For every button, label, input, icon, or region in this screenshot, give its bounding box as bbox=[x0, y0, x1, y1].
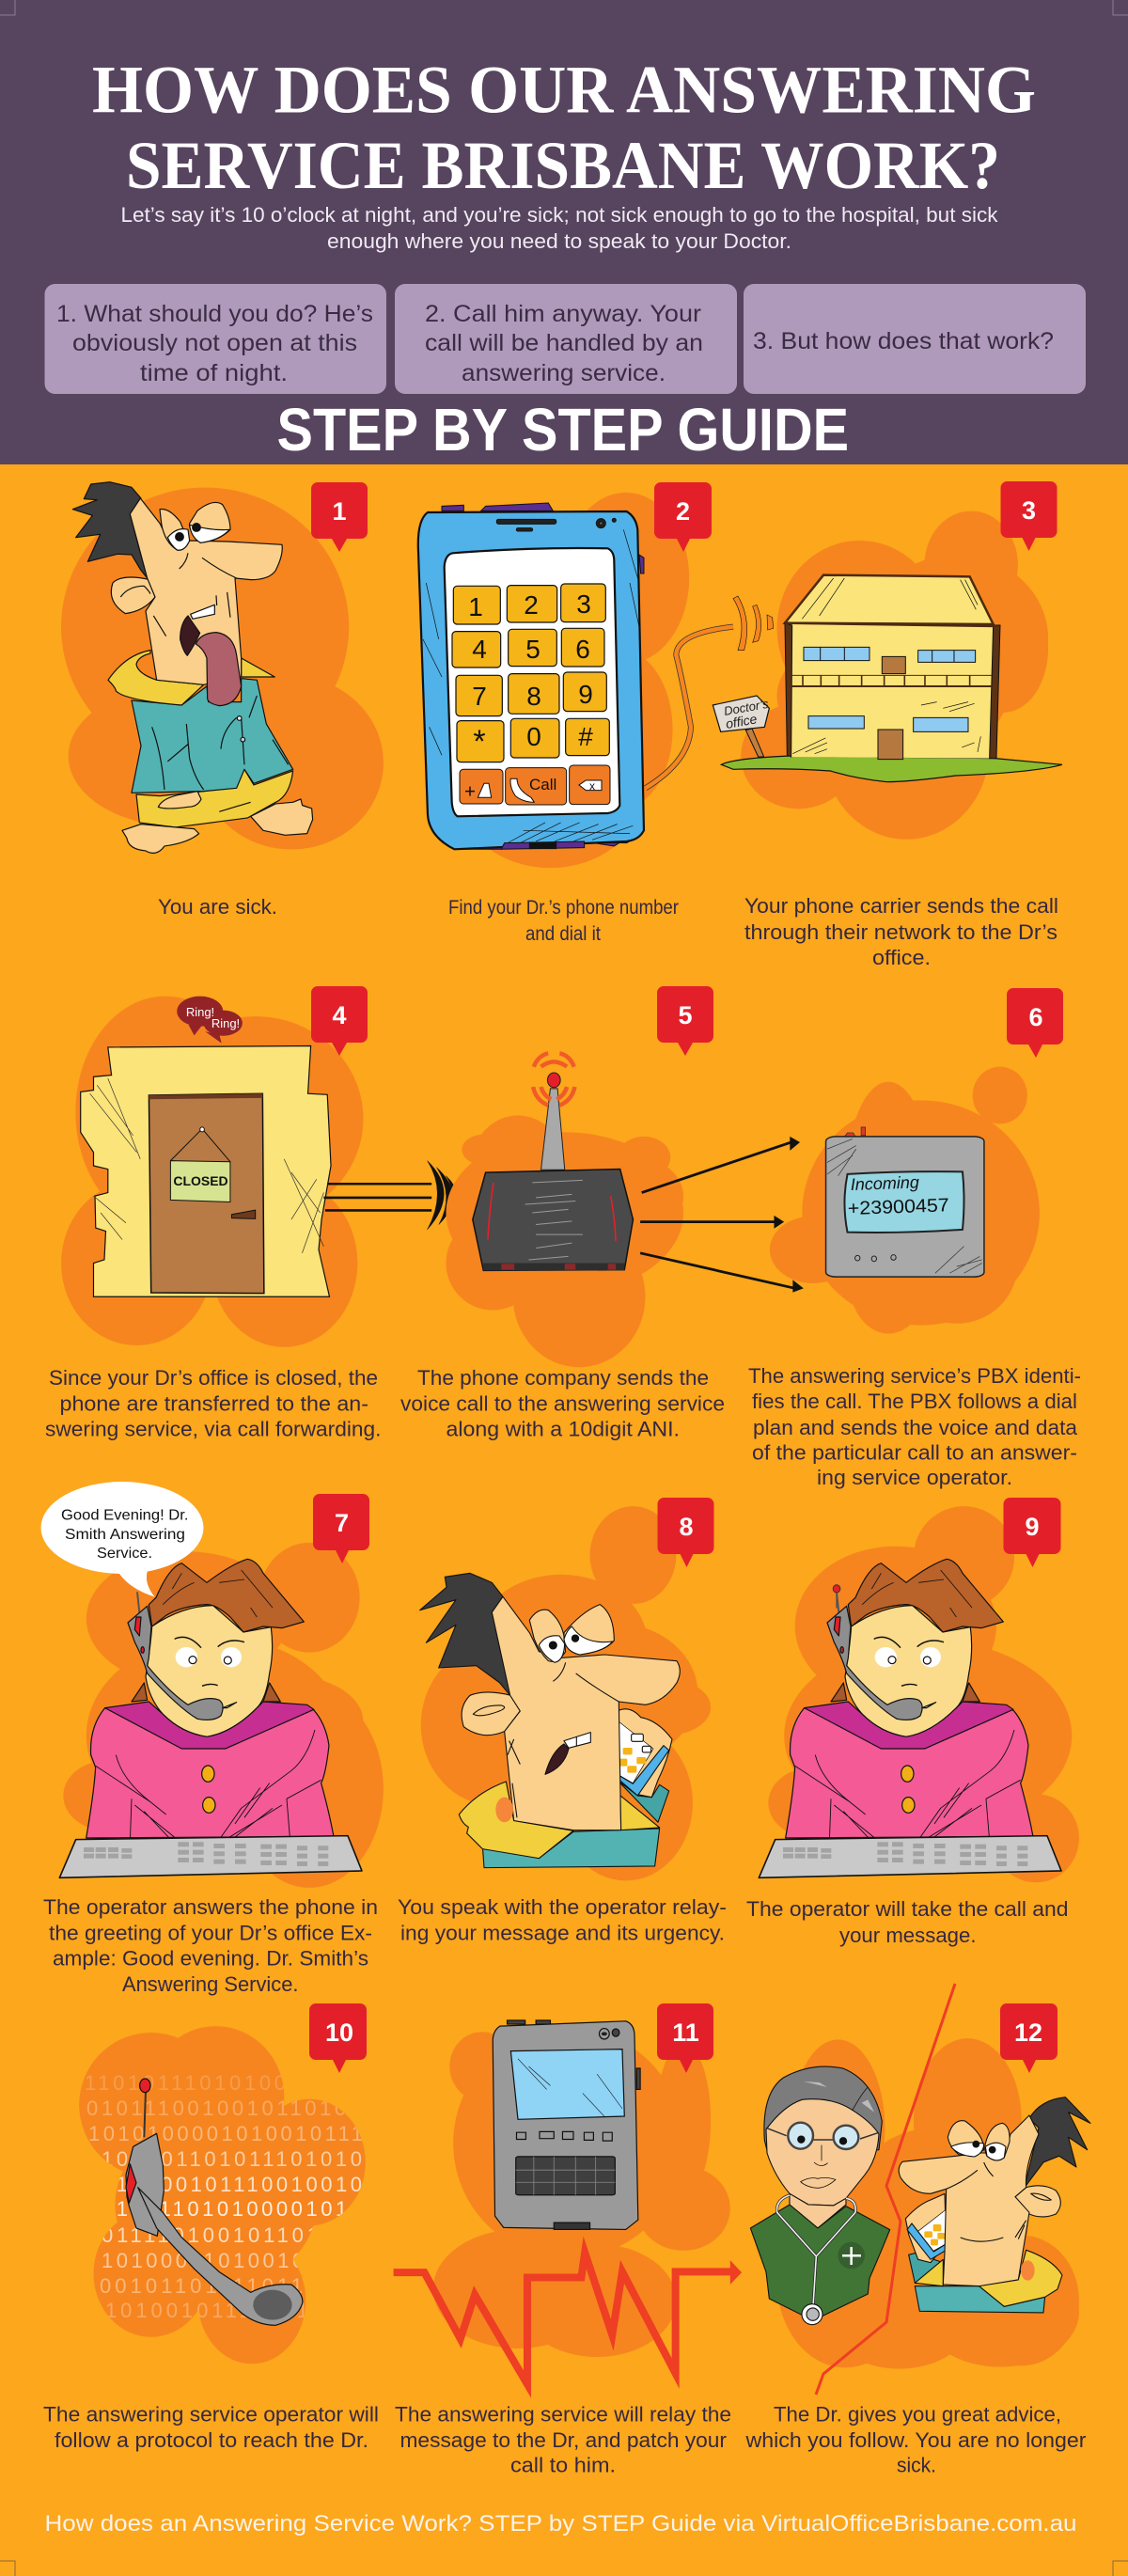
panel: step 5 phone company router bbox=[400, 986, 804, 1440]
caption 4: swering service, via call forwarding. bbox=[45, 1418, 382, 1440]
caption 4: phone are transferred to the an- bbox=[60, 1391, 368, 1416]
step badge 12 bbox=[1000, 2003, 1058, 2073]
icon: operator at keyboard bbox=[759, 1559, 1061, 1877]
caption 8 bbox=[398, 1895, 727, 1944]
caption 3: through their network to the Dr’s bbox=[744, 920, 1058, 944]
caption 10 bbox=[43, 2403, 379, 2452]
icon: recovered patient bbox=[899, 2097, 1090, 2313]
title: HOW DOES OUR ANSWERING bbox=[92, 53, 1036, 128]
question box 2: answering service. bbox=[462, 360, 666, 386]
caption 10: follow a protocol to reach the Dr. bbox=[55, 2428, 368, 2452]
cloud 11 bbox=[433, 2028, 730, 2357]
step badge 3: 3 bbox=[1022, 496, 1036, 525]
icon: PBX display bbox=[826, 1127, 984, 1277]
icon: phone with keypad: * bbox=[473, 724, 486, 760]
panel: step 2 phone bbox=[418, 482, 733, 945]
cloud 7 bbox=[63, 1543, 384, 1888]
caption 12: which you follow. You are no longer bbox=[744, 2428, 1087, 2452]
caption 12 bbox=[744, 2403, 1087, 2476]
panel: step 8 patient speaks bbox=[398, 1498, 727, 1944]
speech bubble: Good Evening! Dr. bbox=[61, 1508, 188, 1523]
caption 4 bbox=[45, 1366, 382, 1440]
intro text: Let’s say it’s 10 o’clock at night, and you’re sick; not sick enough to go to the hospital, but sick bbox=[120, 203, 999, 227]
panel: step 4 closed office bbox=[45, 986, 457, 1440]
step badge 2 bbox=[654, 482, 712, 552]
icon: PBX display: Incoming bbox=[850, 1172, 919, 1194]
binary digits background: 101000110100101 bbox=[102, 2249, 319, 2272]
caption 8: You speak with the operator relay- bbox=[398, 1895, 727, 1919]
intro text bbox=[120, 203, 999, 253]
caption 7: the greeting of your Dr’s office Ex- bbox=[49, 1922, 372, 1944]
icon: closed door bbox=[81, 997, 457, 1296]
icon: phone with keypad: Call bbox=[529, 776, 556, 793]
question box 1: 1. What should you do? He’s bbox=[56, 301, 373, 327]
caption 11: The answering service will relay the bbox=[395, 2403, 731, 2426]
cloud 10 bbox=[79, 2026, 366, 2364]
caption 11: call to him. bbox=[510, 2454, 616, 2476]
step badge 3 bbox=[1000, 481, 1057, 551]
step badge 5 bbox=[657, 986, 713, 1056]
panel: step 12 doctor advice bbox=[744, 1984, 1090, 2476]
step badge 6 bbox=[1007, 988, 1063, 1058]
step badge 12: 12 bbox=[1014, 2018, 1042, 2047]
icon: telephone handset bbox=[126, 2079, 303, 2325]
icon: closed door: Ring! bbox=[186, 1005, 214, 1019]
step badge 4 bbox=[311, 986, 368, 1056]
title bbox=[92, 53, 1036, 203]
binary digits background: 11010111010100 bbox=[85, 2071, 286, 2095]
binary digits background bbox=[85, 2071, 363, 2322]
icon: phone with keypad: x bbox=[589, 779, 595, 793]
step badge 7: 7 bbox=[335, 1509, 349, 1537]
speech bubble: Smith Answering bbox=[65, 1527, 185, 1543]
caption 6: of the particular call to an answer- bbox=[752, 1440, 1077, 1465]
binary digits background: 0101110010010110101 bbox=[86, 2097, 361, 2120]
cloud 4 bbox=[61, 997, 363, 1347]
caption 5: The phone company sends the bbox=[417, 1366, 709, 1390]
caption 6 bbox=[748, 1364, 1081, 1489]
caption 5: along with a 10digit ANI. bbox=[446, 1418, 680, 1440]
step badge 10 bbox=[309, 2003, 367, 2073]
step badge 9: 9 bbox=[1025, 1513, 1040, 1541]
caption 7: The operator answers the phone in bbox=[43, 1895, 378, 1919]
panel: step 10 reach the doctor bbox=[43, 2003, 379, 2452]
title: SERVICE BRISBANE WORK? bbox=[126, 128, 1000, 203]
caption 5 bbox=[400, 1366, 725, 1440]
icon: doctor bbox=[750, 2066, 890, 2325]
caption 9: The operator will take the call and bbox=[746, 1897, 1068, 1921]
icon: office building: Doctor’s bbox=[723, 697, 770, 718]
caption 6: The answering service’s PBX identi- bbox=[748, 1364, 1081, 1388]
panel: step 1 you are sick bbox=[61, 482, 384, 919]
question box 3 bbox=[744, 284, 1086, 394]
cloud 6 bbox=[770, 1067, 1040, 1334]
icon: phone with keypad: 6 bbox=[575, 635, 590, 664]
caption 7: Answering Service. bbox=[122, 1972, 299, 1996]
question box 2: 2. Call him anyway. Your bbox=[425, 301, 701, 327]
icon: operator bbox=[59, 1559, 362, 1877]
icon: phone with keypad: 5 bbox=[525, 635, 540, 664]
panel: step 7 operator answers bbox=[41, 1482, 384, 1996]
binary digits background: 100001101011101010 bbox=[102, 2147, 362, 2171]
caption 5: voice call to the answering service bbox=[400, 1391, 725, 1416]
icon: closed door: Ring! bbox=[212, 1016, 240, 1030]
caption 2 bbox=[448, 897, 679, 945]
icon: grey handset device bbox=[493, 2020, 640, 2229]
icon: phone with keypad: 9 bbox=[578, 680, 593, 709]
icon: phone with keypad: 2 bbox=[524, 590, 539, 620]
question box 3: 3. But how does that work? bbox=[753, 328, 1054, 354]
icon: headset antenna bbox=[833, 1585, 840, 1609]
caption 11 bbox=[395, 2403, 731, 2476]
speech bubble: Service. bbox=[97, 1546, 152, 1562]
icon: phone with keypad: 4 bbox=[472, 635, 487, 664]
cloud 3 bbox=[741, 511, 1048, 840]
binary digits background: 1010100001010010111 bbox=[88, 2122, 363, 2145]
caption 11: message to the Dr, and patch your bbox=[400, 2428, 727, 2452]
question box 1: obviously not open at this bbox=[72, 330, 357, 356]
caption 10: The answering service operator will bbox=[43, 2403, 379, 2426]
step badge 7 bbox=[313, 1494, 369, 1563]
step badge 1 bbox=[311, 482, 368, 552]
step badge 1: 1 bbox=[332, 497, 347, 526]
step by step heading: STEP BY STEP GUIDE bbox=[276, 396, 849, 463]
caption 12: sick. bbox=[897, 2454, 936, 2476]
step badge 10: 10 bbox=[325, 2018, 353, 2047]
cloud 1 bbox=[61, 488, 384, 850]
icon: phone with keypad: # bbox=[578, 722, 593, 751]
cloud 2 bbox=[461, 493, 689, 868]
cloud 9 bbox=[768, 1506, 1079, 1882]
question box 1 bbox=[45, 284, 386, 394]
step badge 11 bbox=[657, 2003, 713, 2073]
icon: closed door: CLOSED bbox=[173, 1173, 228, 1188]
step badge 6: 6 bbox=[1028, 1003, 1043, 1031]
footer text: How does an Answering Service Work? STEP by STEP Guide via VirtualOfficeBrisbane.com.au bbox=[45, 2511, 1077, 2537]
binary digits background: 010100101110010010 bbox=[102, 2173, 362, 2196]
binary digits background: 00101101111011 bbox=[100, 2274, 303, 2298]
binary digits background: 011110100101101 bbox=[102, 2223, 319, 2247]
panel: step 11 relay bbox=[394, 2003, 742, 2476]
icon: phone with keypad: 7 bbox=[472, 682, 487, 711]
icon: phone with keypad: 1 bbox=[468, 592, 483, 621]
divider line red bbox=[816, 1984, 955, 2395]
icon: router with antenna bbox=[473, 1053, 633, 1270]
panel: step 3 doctor's office bbox=[713, 481, 1062, 969]
caption 1: You are sick. bbox=[158, 895, 277, 919]
step badge 9 bbox=[1004, 1498, 1060, 1567]
caption 9: your message. bbox=[839, 1924, 976, 1947]
cloud 5 bbox=[446, 1115, 683, 1367]
question box 2: call will be handled by an bbox=[425, 330, 703, 356]
icon: office building bbox=[713, 575, 1062, 782]
icon: phone with keypad: 0 bbox=[526, 722, 541, 751]
caption 3: Your phone carrier sends the call bbox=[744, 894, 1058, 918]
step badge 11: 11 bbox=[672, 2018, 699, 2047]
caption 6: ing service operator. bbox=[817, 1466, 1012, 1489]
step badge 8 bbox=[658, 1498, 714, 1567]
caption 6: plan and sends the voice and data bbox=[753, 1416, 1078, 1439]
step badge 8: 8 bbox=[679, 1513, 694, 1541]
caption 6: fies the call. The PBX follows a dial bbox=[752, 1390, 1077, 1413]
icon: PBX display: +23900457 bbox=[847, 1195, 949, 1219]
caption 2: Find your Dr.’s phone number bbox=[448, 897, 679, 919]
step badge 4: 4 bbox=[332, 1001, 347, 1029]
step badge 2: 2 bbox=[676, 497, 690, 526]
intro text: enough where you need to speak to your Doctor. bbox=[327, 229, 791, 253]
caption 3: office. bbox=[872, 946, 931, 969]
arrows to PBX bbox=[640, 1137, 804, 1293]
binary digits background: 010111010100001010 bbox=[102, 2197, 362, 2221]
speech bubble bbox=[41, 1482, 203, 1597]
icon: sick man bbox=[72, 482, 313, 853]
caption 3 bbox=[744, 894, 1058, 969]
binary digits background: 10100101111101 bbox=[105, 2299, 308, 2322]
question box 1: time of night. bbox=[140, 360, 288, 386]
icon: phone with keypad: 3 bbox=[576, 589, 591, 619]
caption 4: Since your Dr’s office is closed, the bbox=[49, 1366, 378, 1390]
caption 9 bbox=[746, 1897, 1068, 1947]
question box 2 bbox=[395, 284, 737, 394]
icon: phone with keypad bbox=[418, 503, 733, 849]
caption 7 bbox=[43, 1895, 378, 1996]
cloud 8 bbox=[421, 1506, 711, 1880]
caption 8: ing your message and its urgency. bbox=[400, 1922, 725, 1944]
icon: man talking on phone bbox=[420, 1573, 680, 1868]
caption 2: and dial it bbox=[525, 923, 601, 945]
step badge 5: 5 bbox=[678, 1001, 693, 1029]
caption 12: The Dr. gives you great advice, bbox=[774, 2403, 1061, 2426]
icon: phone with keypad: 8 bbox=[526, 682, 541, 711]
panel: step 6 PBX bbox=[748, 988, 1081, 1489]
arrow: zigzag signal bbox=[394, 2253, 742, 2384]
header panel bbox=[0, 0, 1128, 464]
caption 7: ample: Good evening. Dr. Smith’s bbox=[53, 1946, 368, 1971]
panel: step 9 operator takes call bbox=[746, 1498, 1079, 1947]
cloud 12 bbox=[777, 2038, 1079, 2369]
icon: office building: office bbox=[725, 711, 759, 731]
